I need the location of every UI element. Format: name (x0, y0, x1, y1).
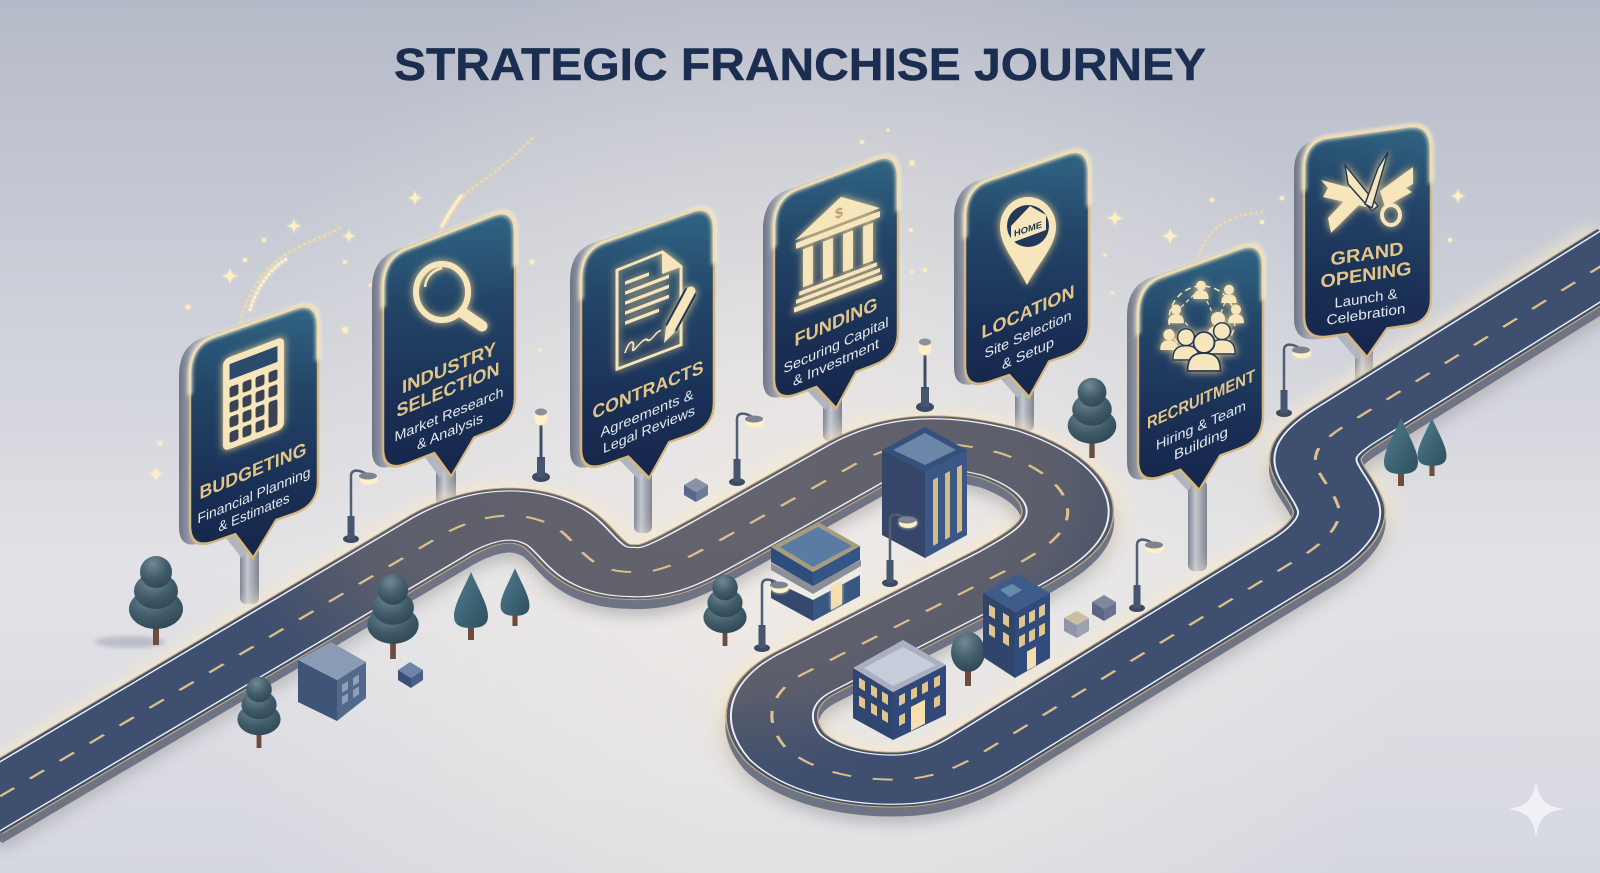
sign 1: Budgeting (179, 297, 318, 584)
icon: bank: $ (835, 205, 843, 223)
building: lower office (853, 640, 946, 740)
road side wall (0, 257, 1600, 823)
subtext: & Setup (1002, 335, 1054, 374)
icon: scissors and ribbon (1321, 152, 1413, 233)
sign 5: Location (954, 143, 1089, 423)
heading: BUDGETING (199, 439, 307, 504)
road edge lines (0, 230, 1600, 832)
subtext: & Analysis (417, 411, 483, 454)
road centre dashes (0, 248, 1600, 814)
street lamps (343, 338, 1311, 612)
subtext: Site Selection (984, 308, 1072, 362)
heading: RECRUITMENT (1147, 365, 1255, 433)
subtext: & Estimates (218, 491, 290, 536)
icon: team network (1160, 281, 1244, 371)
subtext: Market Research (394, 385, 504, 446)
sign 3: Contracts (570, 200, 714, 506)
icon: location pin (1000, 197, 1056, 285)
sign 6: Recruitment (1127, 237, 1263, 516)
building: mid office (983, 574, 1050, 678)
sparkle trails (148, 128, 1466, 482)
road (0, 225, 1600, 852)
subtext: Legal Reviews (603, 403, 695, 457)
icon: contract and pencil (617, 245, 691, 369)
subtext (1326, 285, 1406, 328)
sign 4: Funding (763, 148, 898, 436)
sign 2: Industry Selection (372, 204, 515, 507)
small crates (398, 478, 1116, 688)
subtext: Securing Capital (784, 315, 888, 377)
subtext: Financial Planning (197, 465, 311, 528)
heading: GRAND (1330, 238, 1404, 269)
lamps by buildings (754, 515, 917, 652)
sign 7: Grand Opening (1294, 123, 1431, 368)
road shadow (0, 266, 1600, 832)
building: left cottage (298, 642, 366, 721)
trees (95, 378, 1446, 748)
heading: OPENING (1320, 257, 1412, 292)
heading: CONTRACTS (592, 357, 704, 424)
sign posts (240, 345, 1373, 604)
title: STRATEGIC FRANCHISE JOURNEY (394, 39, 1206, 90)
heading: FUNDING (794, 293, 878, 351)
subtext: & Investment (793, 336, 879, 390)
subtext: Building (1174, 424, 1228, 464)
subtext: Hiring & Team (1156, 398, 1246, 454)
road gold rim (0, 248, 1600, 814)
heading: LOCATION (982, 281, 1074, 344)
subtext: Launch & (1334, 285, 1398, 311)
building: tall tower (882, 427, 967, 558)
subtext: Celebration (1326, 300, 1406, 328)
road surface grey tint (0, 248, 1600, 814)
icon: bank (794, 181, 882, 313)
road warm glow (0, 248, 1600, 814)
building: store (771, 522, 861, 621)
subtext: Agreements & (600, 387, 694, 441)
icon: location pin: HOME (1014, 219, 1042, 239)
heading: SELECTION (396, 359, 500, 422)
icon: calculator (223, 336, 284, 452)
watermark star (1508, 781, 1564, 837)
road surface (0, 248, 1600, 814)
icon: magnifying glass (416, 264, 482, 326)
heading: INDUSTRY (402, 339, 496, 399)
tree by bottom offices (951, 632, 985, 686)
heading (1320, 238, 1412, 292)
